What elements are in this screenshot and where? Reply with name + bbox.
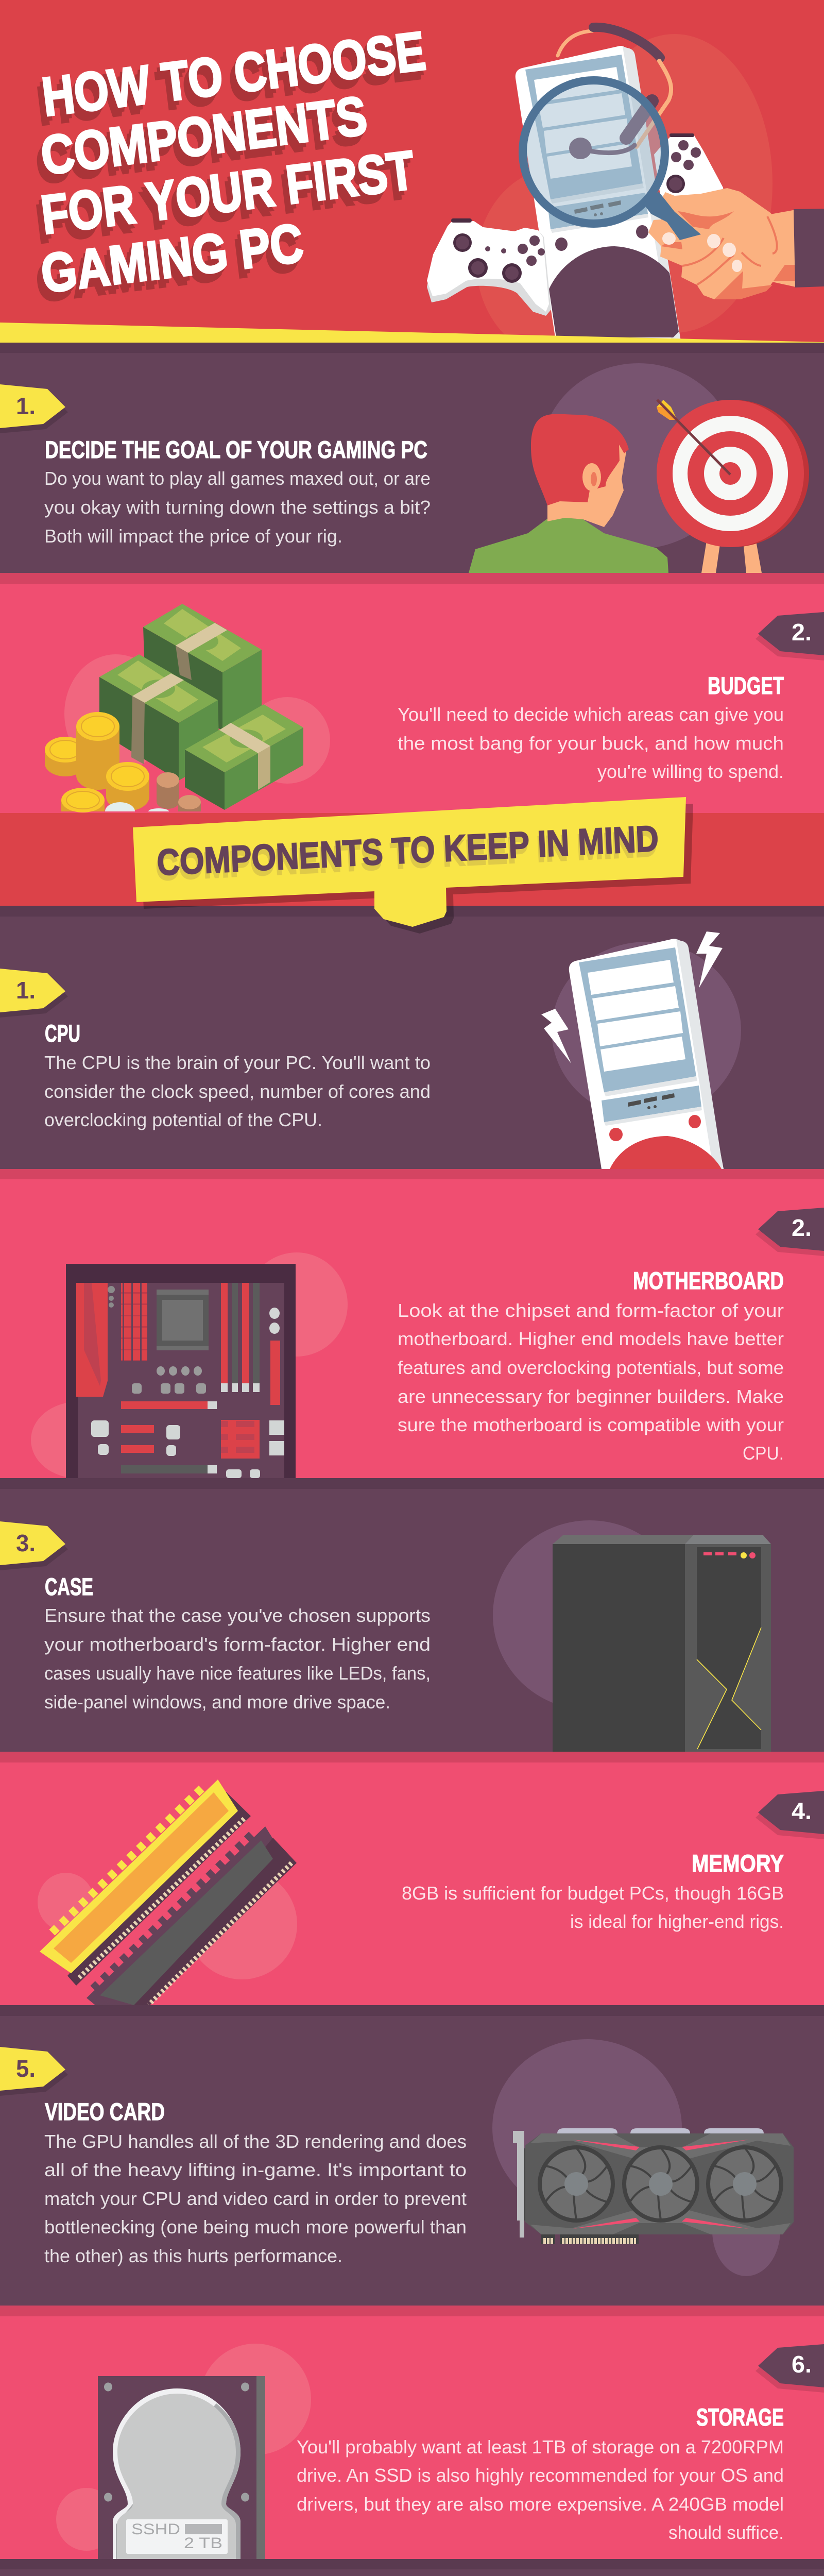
heading: MEMORY — [692, 1850, 784, 1877]
body text: bottlenecking (one being much more powerful than — [44, 2216, 467, 2238]
body text — [44, 1605, 431, 1713]
icon: motherboard — [66, 1264, 296, 1478]
number tag 4 — [756, 1791, 824, 1839]
body text — [44, 468, 431, 547]
body text: match your CPU and video card in order to prevent — [44, 2188, 467, 2209]
heading: VIDEO CARD — [45, 2098, 165, 2125]
finger nails — [662, 232, 742, 272]
body text: are unnecessary for beginner builders. Make — [398, 1386, 784, 1407]
heading: MOTHERBOARD — [633, 1267, 784, 1294]
icon: coins — [45, 712, 201, 812]
body text: is ideal for higher-end rigs. — [570, 1911, 784, 1932]
icon: headset — [558, 27, 671, 159]
body text: you okay with turning down the settings a bit? — [44, 497, 431, 518]
blob — [552, 942, 741, 1119]
body text — [44, 2131, 467, 2266]
body text — [297, 2436, 784, 2543]
icon: lightning bolts — [541, 931, 723, 1063]
title — [38, 21, 428, 304]
icon: yellow RAM stick — [40, 1780, 251, 1986]
number tag 2 — [756, 612, 824, 660]
drive label — [131, 2521, 222, 2552]
body text: your motherboard's form-factor. Higher end — [44, 1634, 431, 1655]
number tag 1: 1. — [16, 977, 36, 1004]
blob — [541, 363, 736, 549]
fan 2 — [624, 2147, 697, 2221]
icon: coat sleeve — [794, 209, 824, 287]
blobs — [492, 2039, 780, 2276]
body text — [398, 704, 784, 782]
heading: BUDGET — [708, 672, 784, 699]
body text: 8GB is sufficient for budget PCs, though 16GB — [402, 1883, 784, 1904]
body text: Look at the chipset and form-factor of your — [398, 1300, 784, 1321]
icon: PC case — [553, 1535, 771, 1752]
icon: left game controller — [427, 218, 551, 316]
icon: target — [657, 400, 809, 573]
body text: Do you want to play all games maxed out, or are — [44, 468, 431, 489]
icon: money stacks — [99, 604, 303, 810]
body text: motherboard. Higher end models have better — [398, 1328, 784, 1349]
title: HOW TO CHOOSE — [39, 21, 428, 128]
number tag 5: 5. — [16, 2055, 36, 2082]
icon: hard drive — [98, 2376, 265, 2559]
panel: budget — [0, 573, 824, 813]
body text: cases usually have nice features like LEDs, fans, — [44, 1663, 431, 1684]
body text: features and overclocking potentials, but some — [398, 1357, 784, 1378]
body text — [44, 1052, 431, 1130]
body text: side-panel windows, and more drive space. — [44, 1691, 390, 1713]
body text: Ensure that the case you've chosen supports — [44, 1605, 431, 1626]
number tag 2: 2. — [792, 619, 812, 646]
icon: graphics card — [513, 2128, 794, 2244]
fan 3 — [708, 2147, 781, 2221]
icon: PC tower — [569, 939, 724, 1169]
number tag 3 — [0, 1521, 68, 1570]
number tag 4: 4. — [792, 1798, 812, 1824]
heading: CPU — [45, 1020, 80, 1047]
panel: memory — [0, 1752, 824, 2005]
body text: the most bang for your buck, and how much — [398, 733, 784, 754]
panel: video card — [0, 2005, 824, 2306]
number tag 2 — [756, 1208, 824, 1256]
drive label: SSHD — [131, 2521, 180, 2538]
body text — [398, 1300, 784, 1464]
panel: power supply — [0, 2559, 824, 2576]
body text: consider the clock speed, number of cores and — [44, 1081, 431, 1102]
blob — [493, 1520, 686, 1710]
panel: case — [0, 1478, 824, 1752]
number tag 1 — [0, 969, 68, 1018]
body text: drive. An SSD is also highly recommended for your OS and — [297, 2465, 784, 2486]
drive label: 2 TB — [184, 2535, 222, 2552]
panel: CPU — [0, 813, 824, 1169]
title: FOR YOUR FIRST — [38, 140, 418, 246]
body text: CPU. — [743, 1443, 784, 1464]
body text: should suffice. — [668, 2522, 784, 2543]
body text: the other) as this hurts performance. — [44, 2245, 342, 2266]
icon: hand — [648, 188, 796, 299]
icon: right game controller — [654, 133, 727, 222]
blobs — [64, 654, 330, 784]
body text: all of the heavy lifting in-game. It's important to — [44, 2159, 467, 2180]
body text: You'll probably want at least 1TB of storage on a 7200RPM — [297, 2436, 784, 2458]
icon: magnifying glass — [523, 80, 701, 240]
body text: Both will impact the price of your rig. — [44, 526, 342, 547]
heading: STORAGE — [696, 2403, 784, 2431]
body text: overclocking potential of the CPU. — [44, 1109, 322, 1130]
callout: components to keep in mind banner: COMPONENTS TO KEEP IN MIND — [156, 818, 660, 884]
hero panel — [0, 0, 824, 358]
body text: drivers, but they are also more expensive. A 240GB model — [297, 2494, 784, 2515]
icon: person — [469, 414, 668, 573]
blobs — [31, 1252, 348, 1478]
number tag 3: 3. — [16, 1530, 36, 1556]
body text: The GPU handles all of the 3D rendering and does — [44, 2131, 467, 2152]
heading: CASE — [45, 1573, 93, 1600]
panel: motherboard — [0, 1169, 824, 1478]
number tag 1 — [0, 384, 68, 433]
blobs — [38, 1869, 297, 1979]
body text: you're willing to spend. — [597, 761, 784, 782]
number tag 6: 6. — [792, 2351, 812, 2378]
heading: DECIDE THE GOAL OF YOUR GAMING PC — [45, 436, 427, 463]
body text: sure the motherboard is compatible with your — [398, 1414, 784, 1435]
fan 1 — [540, 2147, 613, 2221]
number tag 1: 1. — [16, 393, 36, 419]
icon: PC tower — [516, 46, 683, 354]
body text: The CPU is the brain of your PC. You'll want to — [44, 1052, 431, 1073]
number tag 6 — [756, 2344, 824, 2393]
body text: You'll need to decide which areas can give you — [398, 704, 784, 725]
icon: gray RAM stick — [87, 1826, 297, 2005]
yellow wedge — [0, 323, 824, 343]
callout: components to keep in mind banner — [133, 797, 693, 934]
body text — [402, 1883, 784, 1932]
title: COMPONENTS — [38, 85, 370, 187]
number tag 2: 2. — [792, 1214, 812, 1241]
blobs — [56, 2344, 311, 2551]
panel: decide the goal — [0, 343, 824, 573]
number tag 5 — [0, 2047, 68, 2096]
title: GAMING PC — [38, 212, 306, 304]
tower buttons and arch — [549, 225, 679, 337]
panel: storage — [0, 2306, 824, 2559]
